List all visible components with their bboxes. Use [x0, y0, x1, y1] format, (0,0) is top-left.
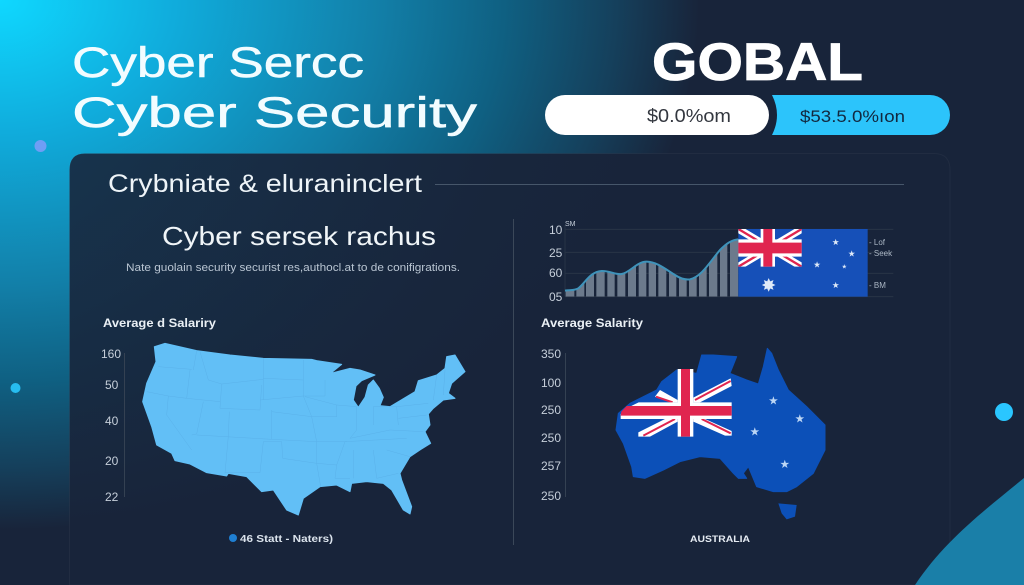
right axis labels: 350 — [541, 347, 561, 361]
decorative dot: upper left — [34, 140, 46, 152]
chart axis labels — [549, 221, 576, 304]
Australian flag: ✸ — [761, 276, 776, 296]
USA map — [143, 343, 465, 515]
stars: ★ — [780, 459, 790, 471]
corner accent shape — [915, 478, 1024, 585]
right axis labels: 250 — [541, 403, 561, 417]
heading: global: GOBAL — [652, 33, 863, 92]
right axis labels: 250 — [541, 489, 561, 503]
trend chart with flag — [565, 225, 893, 297]
left axis labels — [101, 347, 124, 504]
panel heading: Crybniate & eluraninclert — [108, 170, 422, 198]
left axis labels: 40 — [105, 414, 119, 428]
pill: white stat: $0.0%om — [647, 106, 731, 126]
mainland — [616, 348, 825, 492]
left column heading: Average d Salariry — [103, 318, 217, 330]
pill: white stat — [545, 95, 769, 135]
decorative dot: lower left — [10, 383, 20, 393]
decorative dot: right — [995, 403, 1013, 421]
title: Cyber Sercc — [72, 39, 364, 87]
chart side labels: - Lof — [869, 238, 886, 247]
right axis labels: 250 — [541, 431, 561, 445]
stat pills — [545, 95, 950, 135]
stars: ★ — [795, 413, 805, 425]
right axis labels: 257 — [541, 459, 561, 473]
chart side labels: - BM — [869, 281, 886, 290]
section description: Nate guolain security securist res,authocl.at to de conifigrations. — [126, 262, 460, 274]
Australia flag map — [616, 348, 825, 519]
pill: blue stat — [772, 95, 950, 135]
right axis labels — [541, 347, 566, 503]
chart trend line — [565, 239, 738, 291]
right axis labels: 100 — [541, 376, 561, 390]
title: Cyber Security — [72, 89, 478, 137]
left axis labels: 22 — [105, 490, 119, 504]
chart axis labels: 10 — [549, 223, 563, 237]
stars: ★ — [750, 427, 760, 439]
Australian flag: ★ — [848, 248, 855, 258]
chart axis labels: 60 — [549, 266, 563, 280]
union jack — [621, 369, 732, 437]
left axis labels: 160 — [101, 347, 121, 361]
Australian flag: ★ — [832, 237, 839, 247]
chart axis labels: SM — [565, 221, 576, 228]
Australian flag: ★ — [813, 259, 821, 269]
stars — [750, 396, 805, 471]
Australian flag: ★ — [842, 263, 847, 270]
left legend: 46 Statt - Naters) — [240, 534, 333, 545]
pill: blue stat: $53.5.0%ıon — [800, 107, 905, 126]
right column heading: Average Salarity — [541, 318, 644, 330]
chart side labels — [869, 238, 893, 290]
Australia label: AUSTRALIA — [690, 534, 750, 545]
left axis labels: 50 — [105, 378, 119, 392]
chart axis labels: 05 — [549, 290, 563, 304]
stars: ★ — [768, 396, 778, 408]
chart side labels: - Seek — [869, 249, 893, 258]
left axis labels: 20 — [105, 454, 119, 468]
Australian flag: ★ — [832, 280, 839, 290]
Tasmania — [778, 503, 797, 519]
title — [72, 39, 478, 137]
chart bars — [566, 240, 738, 296]
chart axis labels: 25 — [549, 246, 563, 260]
main panel — [70, 154, 950, 585]
section heading: Cyber sersek rachus — [162, 221, 436, 251]
Australian flag — [738, 229, 868, 297]
